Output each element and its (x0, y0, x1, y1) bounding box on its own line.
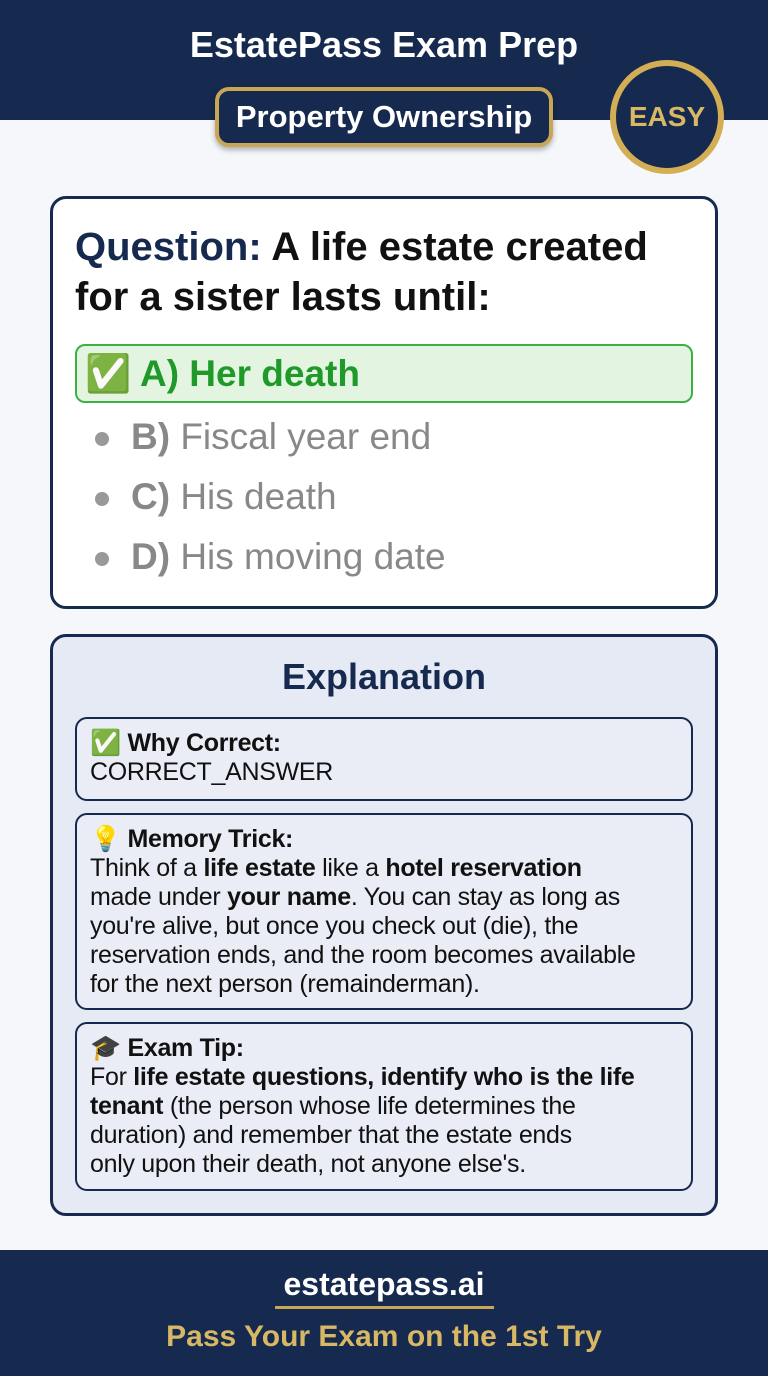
exam tip box (75, 1022, 693, 1191)
panel: question (50, 196, 718, 609)
exam tip box: only upon their death, not anyone else's. (90, 1150, 526, 1178)
option A correct (75, 344, 693, 403)
exam tip box: For life estate questions, identify who is the life (90, 1063, 635, 1091)
category pill: Property Ownership (236, 99, 532, 134)
memory trick box: Think of a life estate like a hotel reservation made under your name. You can stay as long as you're alive, but once you check out (die), the reservation ends, and the room becomes available for the next person (remainderman). (90, 854, 636, 998)
why correct box: ✅ Why Correct: (90, 729, 281, 757)
difficulty badge: EASY (629, 101, 705, 132)
category pill (215, 87, 553, 147)
option B: B) Fiscal year end (131, 416, 431, 457)
footer url: estatepass.ai (283, 1266, 484, 1302)
header band (0, 0, 768, 120)
exam tip box: 🎓 Exam Tip: (90, 1034, 244, 1062)
why correct box (75, 717, 693, 801)
exam tip box: tenant (the person whose life determines the (90, 1092, 576, 1120)
option A correct: ✅ A) Her death (85, 353, 360, 394)
footer (0, 1250, 768, 1376)
difficulty badge (610, 60, 724, 174)
option D: D) His moving date (131, 536, 446, 577)
option C: C) His death (131, 476, 337, 517)
footer tagline: Pass Your Exam on the 1st Try (166, 1320, 602, 1353)
panel: explanation (50, 634, 718, 1216)
why correct box: CORRECT_ANSWER (90, 758, 333, 786)
underline (275, 1306, 494, 1309)
memory trick box (75, 813, 693, 1010)
question text: Question: A life estate created for a sister lasts until: (75, 225, 648, 319)
exam tip box: duration) and remember that the estate ends (90, 1121, 572, 1149)
title: EstatePass Exam Prep (190, 24, 578, 65)
explanation heading: Explanation (282, 656, 486, 697)
memory trick box: 💡 Memory Trick: (90, 825, 293, 853)
